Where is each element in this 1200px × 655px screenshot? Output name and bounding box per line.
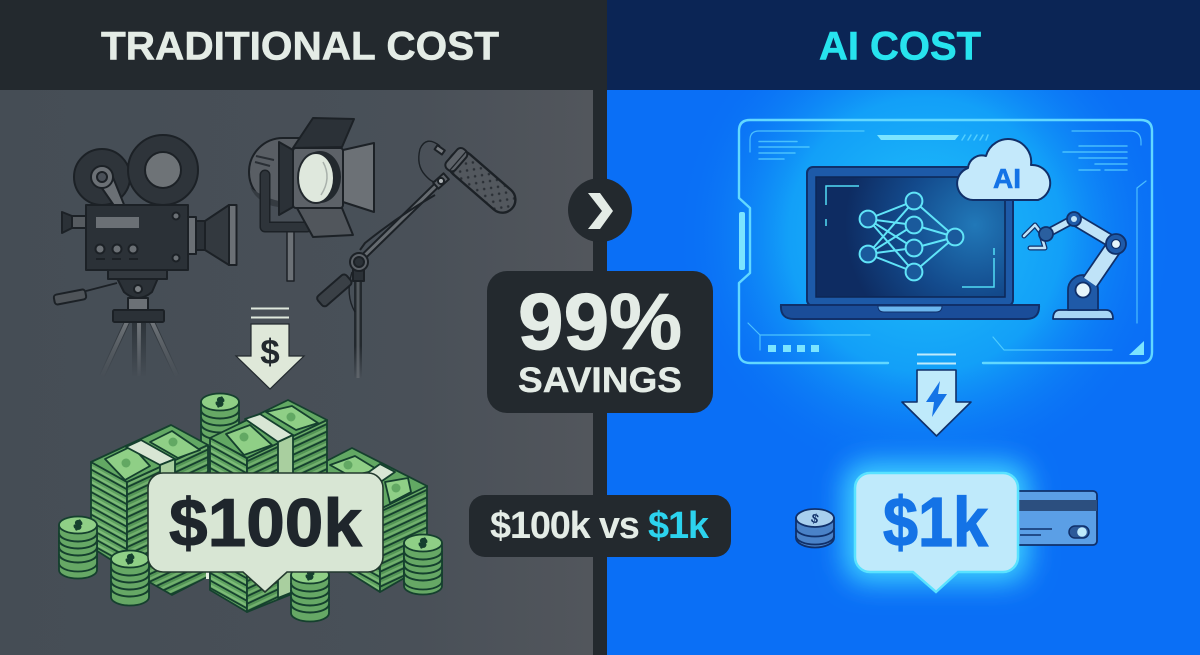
- label: savings: SAVINGS: [518, 361, 682, 400]
- callout: $100k: [148, 473, 383, 592]
- panel: traditional cost background: [0, 90, 594, 655]
- illustration: stacks of cash and coins: [59, 394, 442, 622]
- callout: $1k: [855, 473, 1018, 592]
- panel: AI cost background: [606, 90, 1200, 655]
- coin stack behind centre: [201, 394, 239, 448]
- heading: AI cost: AI COST: [819, 24, 981, 68]
- arrow: traditional cost down to total: $: [260, 333, 280, 372]
- callout: $100k vs $1k: [469, 495, 731, 557]
- header: traditional cost: [0, 0, 600, 90]
- coin stacks: foreground: [59, 516, 442, 622]
- callout: 99% savings: [487, 271, 713, 413]
- header: AI cost: [607, 0, 1200, 90]
- icon: AI cloud: AI: [993, 163, 1021, 194]
- panel: AI interface frame: [739, 120, 1152, 363]
- icon: small coin stack: [796, 509, 834, 548]
- callout: $100k vs $1k: $100k vs $1k: [490, 505, 710, 547]
- arrow: traditional cost down to total: [236, 308, 304, 389]
- heading: traditional cost: TRADITIONAL COST: [101, 24, 499, 68]
- badge: chevron arrow: [568, 178, 632, 242]
- icon: credit card: [990, 491, 1097, 545]
- glow behind $1k callout: [845, 463, 1028, 582]
- callout: $100k: $100k: [169, 485, 362, 561]
- screen corner brackets: [826, 186, 994, 287]
- callout: $1k: $1k: [883, 483, 988, 561]
- cash stack: right: [313, 448, 427, 592]
- arrow: AI cost down to total: [902, 354, 971, 436]
- neural network diagram: [860, 193, 963, 280]
- icon: boom microphone on stand: [316, 141, 521, 378]
- cash stack: left: [91, 425, 208, 595]
- cash stack: centre: [210, 400, 327, 612]
- icon: studio light with barn doors: [249, 118, 374, 281]
- stat: 99%: 99%: [518, 277, 682, 366]
- icon: AI cloud: [957, 139, 1050, 200]
- icon: laptop with neural network: [781, 167, 1039, 319]
- icon: film camera on tripod: [53, 135, 236, 376]
- icon: robot arm: [1024, 212, 1126, 319]
- icon: small coin stack: $: [809, 510, 821, 527]
- centre divider: [593, 0, 607, 655]
